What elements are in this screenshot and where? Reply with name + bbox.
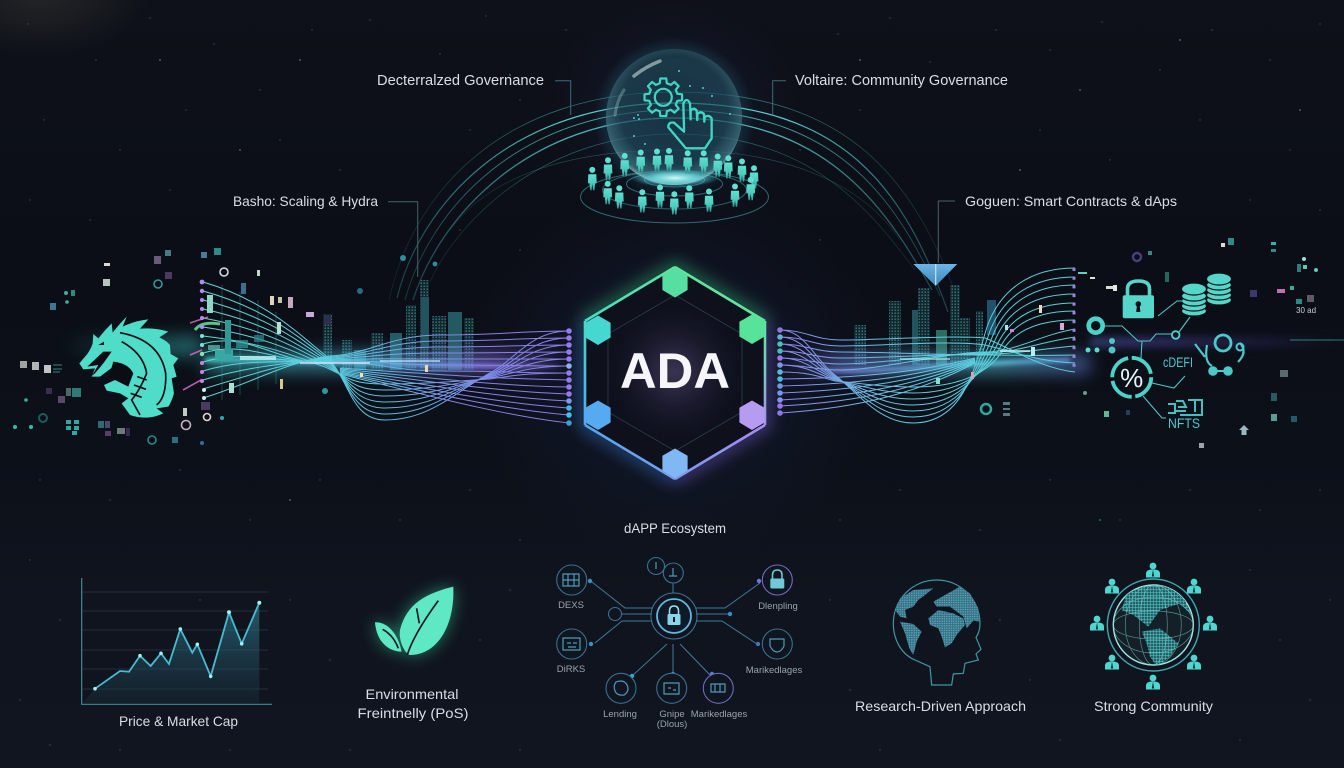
label: Goguen: Goguen: Smart Contracts & dAps — [965, 193, 1177, 209]
node labels — [557, 600, 802, 730]
small label: 30 ad — [1296, 306, 1316, 315]
ladder details — [183, 255, 440, 400]
node labels: (Dlous) — [657, 719, 687, 730]
DeFi label: cDEFI — [1163, 355, 1193, 370]
left city skyline — [323, 280, 474, 370]
left particles — [13, 248, 228, 445]
label: Basho: Basho: Scaling & Hydra — [233, 193, 378, 209]
node labels: DiRKS — [557, 664, 585, 675]
right stream nodes — [900, 268, 1117, 416]
icon: leaf — [375, 587, 453, 655]
icon: pointing hand — [668, 100, 712, 148]
governance sphere — [580, 37, 768, 223]
node labels: Lending — [603, 709, 637, 720]
circuit lines — [1104, 301, 1190, 418]
icon: globe head — [893, 580, 981, 685]
heading: dAPP Ecosystem — [624, 521, 726, 536]
panel: price chart — [82, 578, 272, 729]
label: Decentralized Governance: Decterralzed Governance — [377, 73, 544, 89]
node labels: Gnipe — [659, 709, 685, 720]
label: Voltaire — [773, 73, 1008, 115]
panel: research-driven approach — [855, 580, 1026, 714]
panel: environmental: Freintnelly (PoS) — [358, 705, 468, 721]
icon: gear — [645, 79, 682, 116]
DeFi icon cluster — [1086, 273, 1244, 431]
hexagon nodes — [585, 268, 765, 478]
icon: NFT glyph — [1168, 400, 1202, 415]
label: Goguen — [938, 193, 1177, 263]
markers — [93, 601, 261, 690]
right particles — [1083, 238, 1344, 448]
icon: percent badge — [1112, 358, 1151, 397]
ADA hexagon — [585, 267, 765, 479]
icon: percent badge: % — [1120, 363, 1143, 393]
icon: network — [1195, 335, 1244, 376]
line — [95, 603, 259, 689]
node labels: Dlenpling — [758, 601, 798, 612]
panel: environmental — [358, 587, 468, 721]
icon: community members — [1090, 563, 1217, 690]
panel: strong community — [1090, 563, 1217, 714]
right city skyline — [854, 285, 996, 365]
area — [82, 603, 259, 704]
node glyphs — [563, 562, 784, 695]
node labels: Marikedlages — [746, 665, 802, 676]
node labels: Marikedlages — [691, 709, 747, 720]
right data stream — [780, 268, 1340, 423]
gridlines and axes — [82, 578, 272, 704]
node rings — [557, 558, 792, 703]
base rings — [580, 171, 768, 223]
dApp ecosystem — [557, 521, 802, 730]
left data stream — [60, 255, 569, 423]
label: Research-Driven Approach — [855, 698, 1026, 714]
connectors — [590, 580, 760, 676]
node labels: DEXS — [558, 600, 584, 611]
label: Price & Market Cap — [119, 713, 238, 729]
icon: triangle marker — [913, 264, 957, 286]
community figures — [588, 148, 758, 214]
ADA label: ADA — [620, 343, 730, 399]
right hexagon connector dots — [777, 327, 783, 416]
label: Voltaire: Voltaire: Community Governance — [795, 73, 1008, 89]
NFTs label: NFTS — [1168, 415, 1200, 431]
icon: globe — [1107, 579, 1199, 671]
label: Decentralized Governance — [377, 73, 571, 115]
icon: dragon — [79, 317, 178, 418]
label: Basho — [233, 193, 418, 277]
icon: coin stacks — [1182, 273, 1232, 316]
left hexagon connector dots — [566, 328, 572, 426]
label: Environmental — [366, 686, 458, 702]
hub — [651, 593, 697, 639]
label: Strong Community — [1094, 698, 1213, 714]
icon: lock — [1123, 281, 1154, 318]
left stream nodes — [200, 280, 206, 400]
governance arch — [389, 92, 958, 312]
